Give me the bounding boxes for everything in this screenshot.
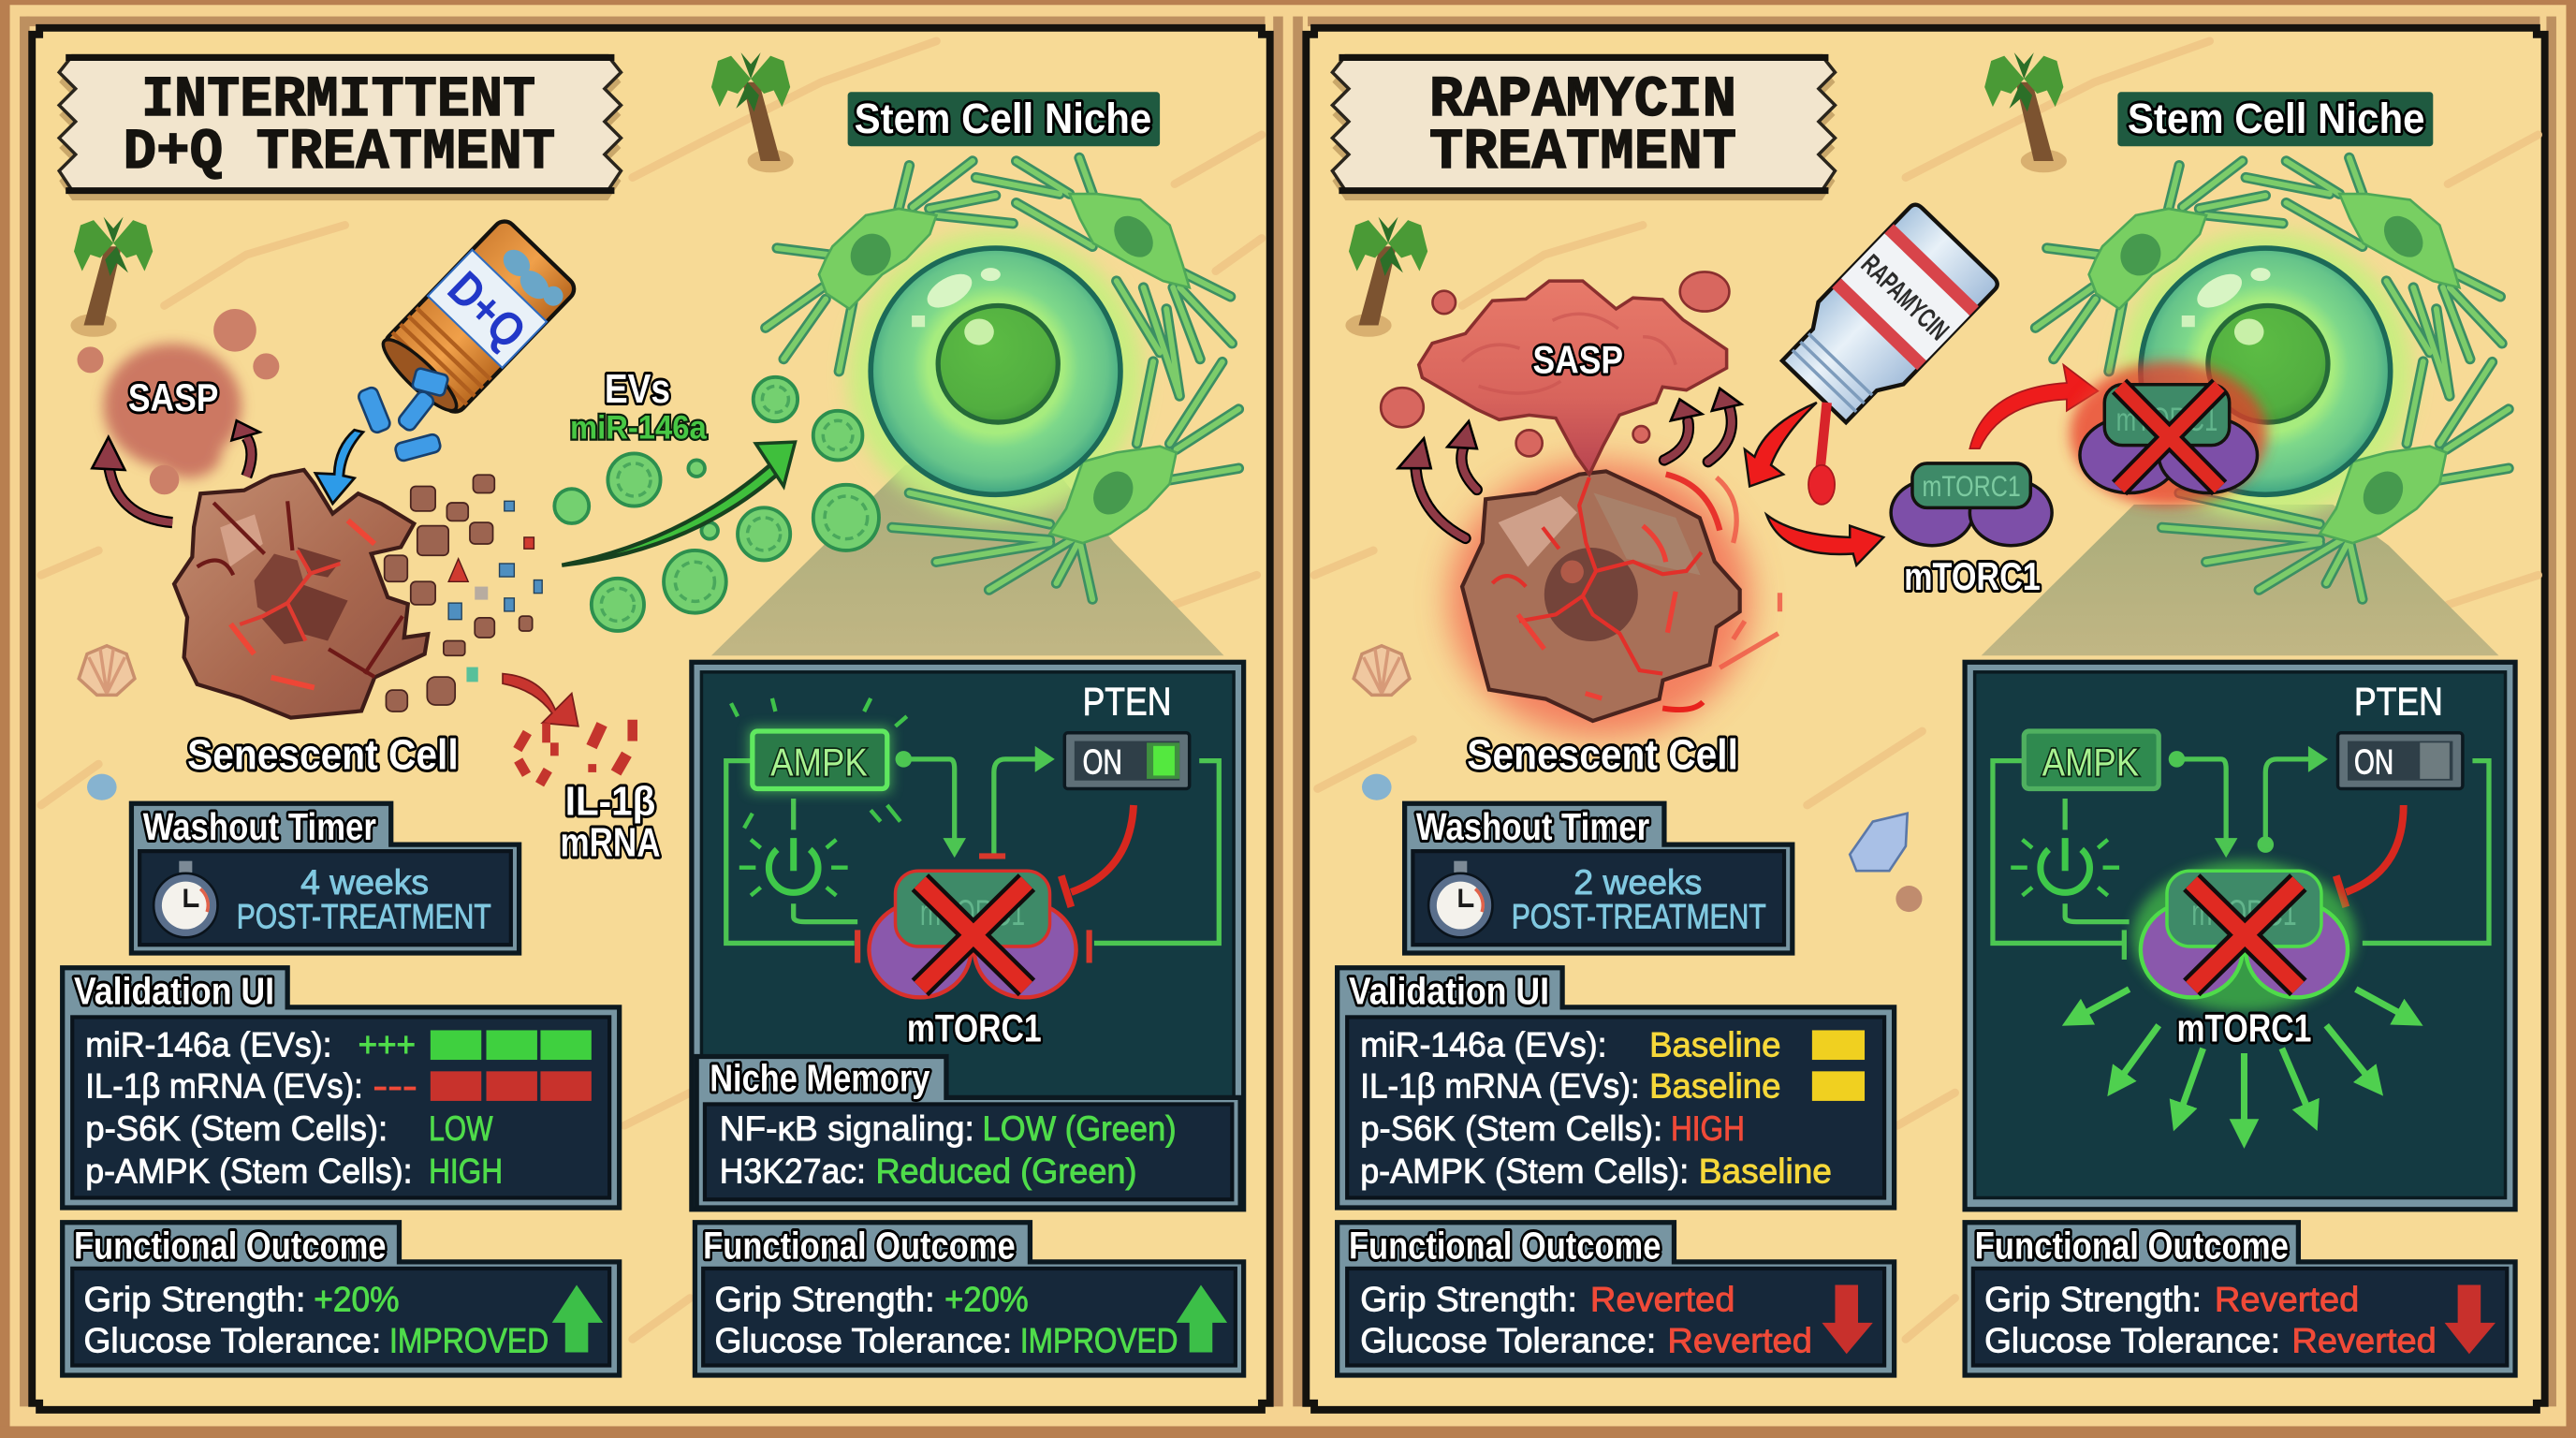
icon: rapamycin vial: RAPAMYCIN — [1855, 249, 1954, 346]
functional outcome panel — [63, 1223, 620, 1375]
washout timer panel: POST-TREATMENT — [237, 898, 491, 936]
yellow indicators — [1812, 1030, 1865, 1101]
red drip and arrows — [1745, 365, 2098, 565]
extracellular vesicles — [554, 377, 879, 631]
validation UI panel: HIGH — [429, 1152, 503, 1191]
PTEN switch — [1064, 733, 1190, 788]
PTEN label: PTEN — [2354, 679, 2443, 723]
AMPK node — [731, 698, 907, 829]
functional outcome panel: Glucose Tolerance: — [1984, 1321, 2280, 1359]
pathway connectors — [726, 759, 1219, 943]
validation UI panel — [63, 968, 620, 1208]
validation UI panel: +++ — [359, 1026, 416, 1064]
functional outcome panel: +20% — [944, 1281, 1029, 1319]
niche memory panel: Niche Memory — [710, 1056, 930, 1099]
icon: D+Q pill bottle: D+Q — [438, 261, 536, 359]
title banner — [59, 56, 621, 200]
icon: shell — [79, 646, 135, 695]
PTEN switch: ON — [2354, 743, 2393, 782]
senescent cell with red glow — [1449, 462, 1779, 738]
power icon — [739, 838, 848, 896]
icon: conch shell — [1850, 814, 1908, 871]
validation UI panel: --- — [373, 1066, 417, 1105]
IL-1β mRNA label: mRNA — [560, 819, 661, 865]
SASP cloud — [77, 309, 279, 494]
mTORC1 label: mTORC1 — [907, 1006, 1042, 1050]
functional outcome panel: Grip Strength: — [1984, 1281, 2202, 1319]
icon: pebble — [1895, 886, 1922, 912]
SASP cloud: SASP — [1533, 337, 1623, 381]
pathway panel — [1965, 662, 2515, 1210]
niche memory panel: Reduced (Green) — [875, 1152, 1137, 1191]
icon: shell — [1354, 646, 1410, 695]
inhibitors and heads — [857, 746, 1134, 962]
functional outcome panel: Reverted — [1590, 1281, 1734, 1319]
down arrow — [2445, 1284, 2496, 1354]
AMPK node — [2024, 731, 2159, 788]
mTORC1 label: mTORC1 — [2177, 1006, 2311, 1050]
icon: stopwatch — [154, 861, 218, 937]
functional outcome panel: Glucose Tolerance: — [714, 1321, 1012, 1359]
functional outcome panel: Functional Outcome — [74, 1224, 386, 1267]
PTEN switch — [2338, 733, 2463, 788]
PTEN label: PTEN — [1083, 679, 1171, 723]
functional outcome panel — [1965, 1223, 2515, 1375]
validation UI panel: p-AMPK (Stem Cells): — [85, 1152, 413, 1191]
up arrow — [1177, 1284, 1227, 1352]
red arrow to IL-1β — [503, 674, 578, 726]
functional outcome panel — [1338, 1223, 1895, 1375]
functional outcome panel: Functional Outcome — [703, 1224, 1016, 1267]
EVs label: miR-146a — [570, 410, 707, 447]
functional outcome panel: Grip Strength: — [714, 1281, 935, 1319]
sand streaks — [41, 41, 1262, 1339]
functional outcome panel: Grip Strength: — [1360, 1281, 1577, 1319]
functional outcome panel: IMPROVED — [389, 1321, 549, 1359]
EVs label: EVs — [605, 366, 670, 412]
stem cell niche illustration — [766, 157, 1238, 599]
green bars — [431, 1030, 592, 1060]
sand streaks — [1314, 41, 2539, 1339]
validation UI panel: Baseline — [1649, 1026, 1781, 1064]
icon: palm tree — [1984, 52, 2067, 172]
washout timer panel: Washout Timer — [143, 805, 376, 848]
free mTORC1 complex: mTORC1 — [1922, 469, 2021, 503]
niche memory panel: NF-κB signaling: — [720, 1109, 974, 1148]
icon: rapamycin vial — [1772, 201, 2000, 433]
validation UI panel: IL-1β mRNA (EVs): — [1360, 1066, 1640, 1105]
IL-1β mRNA fragments — [513, 720, 637, 786]
mTORC1 bound to stem cell, blocked — [2070, 361, 2267, 506]
SASP cloud — [1381, 271, 1729, 475]
stem cell niche label: Stem Cell Niche — [2128, 95, 2425, 142]
validation UI panel: p-AMPK (Stem Cells): — [1360, 1152, 1689, 1191]
SASP cloud: SASP — [128, 375, 218, 419]
title banner: RAPAMYCIN — [1429, 68, 1736, 133]
icon: palm tree — [70, 217, 153, 337]
IL-1β mRNA label — [560, 779, 661, 865]
output arrows — [2075, 990, 2410, 1134]
validation UI panel: p-S6K (Stem Cells): — [85, 1109, 388, 1148]
validation UI panel: Baseline — [1649, 1066, 1781, 1105]
stem cell niche label: Stem Cell Niche — [855, 95, 1151, 142]
validation UI panel: Validation UI — [74, 969, 274, 1012]
functional outcome panel: Grip Strength: — [84, 1281, 305, 1319]
functional outcome panel: Reverted — [2215, 1281, 2359, 1319]
niche memory panel: H3K27ac: — [720, 1152, 866, 1191]
icon: palm tree — [1345, 217, 1427, 337]
icon: blue pills — [357, 367, 449, 462]
mTORC1 complex inhibited: mTORC1 — [920, 893, 1025, 933]
panel: rapamycin treatment — [1306, 28, 2545, 1410]
green arrow to stem cell — [562, 442, 795, 565]
mTORC1 complex with green glow: mTORC1 — [2191, 893, 2297, 933]
senescent cell label: Senescent Cell — [1467, 730, 1738, 778]
inhibitors and heads — [2124, 746, 2404, 960]
washout timer panel: Washout Timer — [1416, 805, 1649, 848]
washout timer panel — [131, 803, 520, 953]
red bars — [431, 1071, 592, 1101]
mTORC1 label: mTORC1 — [1904, 554, 2041, 598]
zoom beam — [1982, 505, 2499, 655]
niche memory panel: LOW (Green) — [983, 1109, 1177, 1148]
icon: D+Q pill bottle — [375, 217, 578, 422]
pathway connectors — [1993, 759, 2489, 943]
senescent cell fragmenting — [174, 470, 542, 718]
validation UI panel: IL-1β mRNA (EVs): — [85, 1066, 363, 1105]
functional outcome panel: +20% — [314, 1281, 399, 1319]
washout timer panel: 4 weeks — [300, 863, 429, 902]
pathway panel — [692, 662, 1244, 1210]
title banner: TREATMENT — [1429, 121, 1736, 185]
niche memory panel — [696, 1056, 1240, 1208]
functional outcome panel: Functional Outcome — [1975, 1224, 2289, 1267]
washout timer panel: 2 weeks — [1573, 863, 1702, 902]
icon: palm tree — [711, 52, 794, 172]
validation UI panel: LOW — [429, 1109, 493, 1148]
functional outcome panel: Functional Outcome — [1349, 1224, 1661, 1267]
functional outcome panel: IMPROVED — [1020, 1321, 1178, 1359]
AMPK node: AMPK — [770, 740, 868, 784]
mTORC1 complex inhibited — [869, 871, 1076, 997]
validation UI panel: miR-146a (EVs): — [85, 1026, 332, 1064]
functional outcome panel: Glucose Tolerance: — [1360, 1321, 1656, 1359]
SASP arrows — [92, 420, 259, 522]
stem cell niche illustration — [2036, 157, 2509, 599]
EVs label — [570, 366, 707, 447]
validation UI panel: Baseline — [1699, 1152, 1832, 1191]
title banner: INTERMITTENT — [141, 68, 535, 133]
icon: small shell — [87, 774, 117, 800]
mTORC1 bound to stem cell, blocked: mTORC1 — [2116, 402, 2217, 438]
down arrow — [1822, 1284, 1873, 1354]
washout timer panel: POST-TREATMENT — [1512, 898, 1766, 936]
functional outcome panel — [695, 1223, 1244, 1375]
free mTORC1 complex — [1891, 463, 2052, 546]
functional outcome panel: Glucose Tolerance: — [84, 1321, 381, 1359]
panel: intermittent D+Q treatment — [32, 28, 1270, 1410]
PTEN switch: ON — [1083, 743, 1122, 782]
validation UI panel: Validation UI — [1349, 969, 1549, 1012]
validation UI panel: miR-146a (EVs): — [1360, 1026, 1606, 1064]
validation UI panel: p-S6K (Stem Cells): — [1360, 1109, 1662, 1148]
zoom beam — [711, 465, 1224, 655]
senescent cell label: Senescent Cell — [187, 730, 459, 778]
power icon — [2011, 838, 2119, 896]
validation UI panel: HIGH — [1671, 1109, 1745, 1148]
icon: stopwatch — [1428, 861, 1493, 937]
validation UI panel — [1338, 968, 1895, 1208]
IL-1β mRNA label: IL-1β — [565, 779, 655, 825]
functional outcome panel: Reverted — [1667, 1321, 1812, 1359]
up arrow — [552, 1284, 603, 1352]
mTORC1 complex with green glow — [2132, 861, 2356, 1012]
icon: small shell — [1362, 774, 1392, 800]
SASP arrows — [1398, 389, 1741, 538]
functional outcome panel: Reverted — [2291, 1321, 2437, 1359]
blue arrow — [315, 430, 363, 504]
AMPK node: AMPK — [2042, 740, 2139, 784]
title banner: D+Q TREATMENT — [124, 121, 555, 185]
washout timer panel — [1405, 803, 1793, 953]
title banner — [1332, 56, 1835, 200]
